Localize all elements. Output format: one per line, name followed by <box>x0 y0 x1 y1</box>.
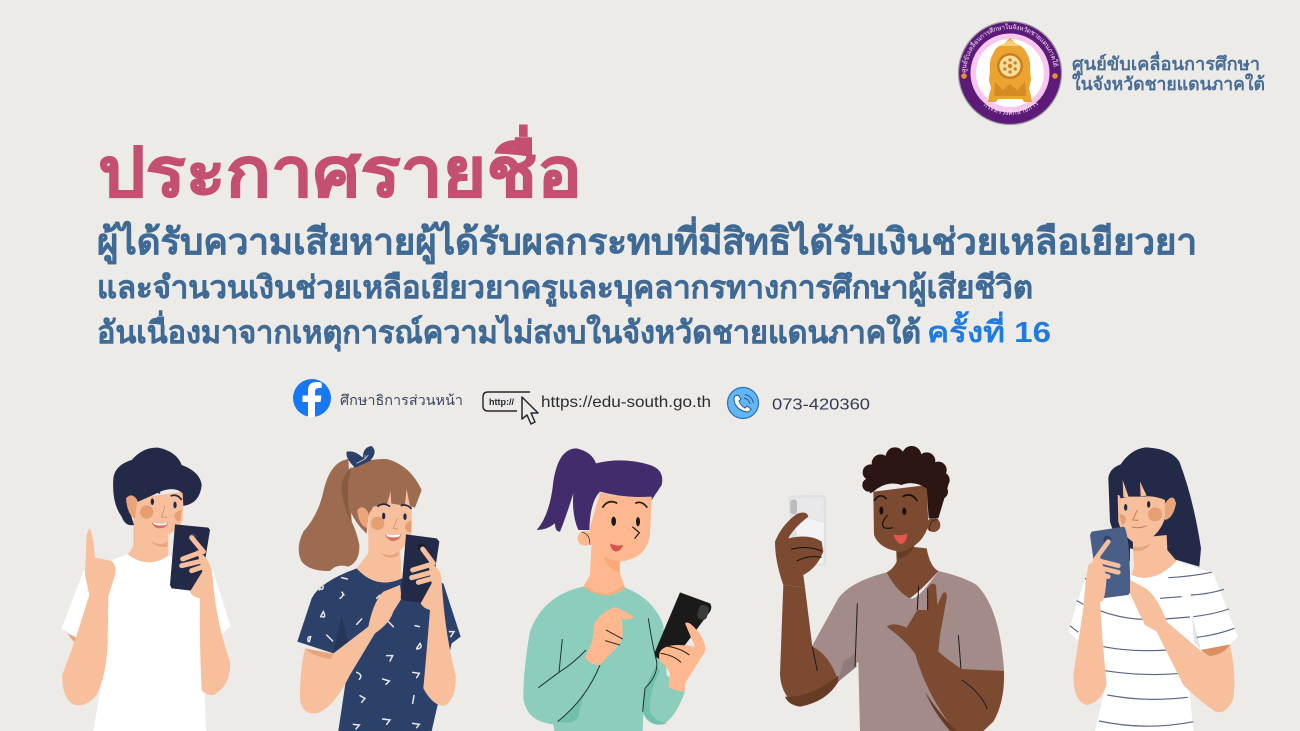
person 3: woman with purple hair and teal sweater <box>523 448 711 731</box>
contact: website: https://edu-south.go.th <box>541 394 711 411</box>
person 2: girl with ponytail and navy shirt <box>297 446 461 731</box>
person 4: man with curly hair and taupe shirt <box>775 446 1004 731</box>
logo: ministry seal: กระทรวงศึกษาธิการ <box>984 102 1038 115</box>
subtitle line 1: ผู้ได้รับความเสียหายผู้ได้รับผลกระทบที่มีสิทธิได้รับเงินช่วยเหลือเยียวยา <box>97 216 1197 265</box>
icon: phone <box>728 388 758 418</box>
person 5: woman with long hair and striped shirt <box>1068 447 1238 731</box>
organisation name: ในจังหวัดชายแดนภาคใต้ <box>1072 73 1265 94</box>
icon: browser link and cursor: http:// <box>489 397 514 407</box>
subtitle line 3: อันเนื่องมาจากเหตุการณ์ความไม่สงบในจังหวัดชายแดนภาคใต้ <box>97 310 921 352</box>
highlight: round number: ครั้งที่ 16 <box>927 310 1051 349</box>
logo: ministry seal: ศูนย์ขับเคลื่อนการศึกษาในจังหวัดชายแดนภาคใต้ <box>962 23 1059 72</box>
title: ประกาศรายชื่อ <box>98 124 582 211</box>
subtitle line 2: และจำนวนเงินช่วยเหลือเยียวยาครูและบุคลากรทางการศึกษาผู้เสียชีวิต <box>97 270 1033 307</box>
person 1: boy in white shirt <box>62 448 231 731</box>
icon: browser link and cursor <box>483 392 538 424</box>
organisation name <box>1072 51 1265 94</box>
contact: facebook page: ศึกษาธิการส่วนหน้า <box>340 392 463 408</box>
contact: phone number: 073-420360 <box>772 396 870 414</box>
logo: ministry seal <box>958 20 1062 126</box>
icon: facebook <box>293 379 331 417</box>
organisation name: ศูนย์ขับเคลื่อนการศึกษา <box>1072 51 1260 76</box>
